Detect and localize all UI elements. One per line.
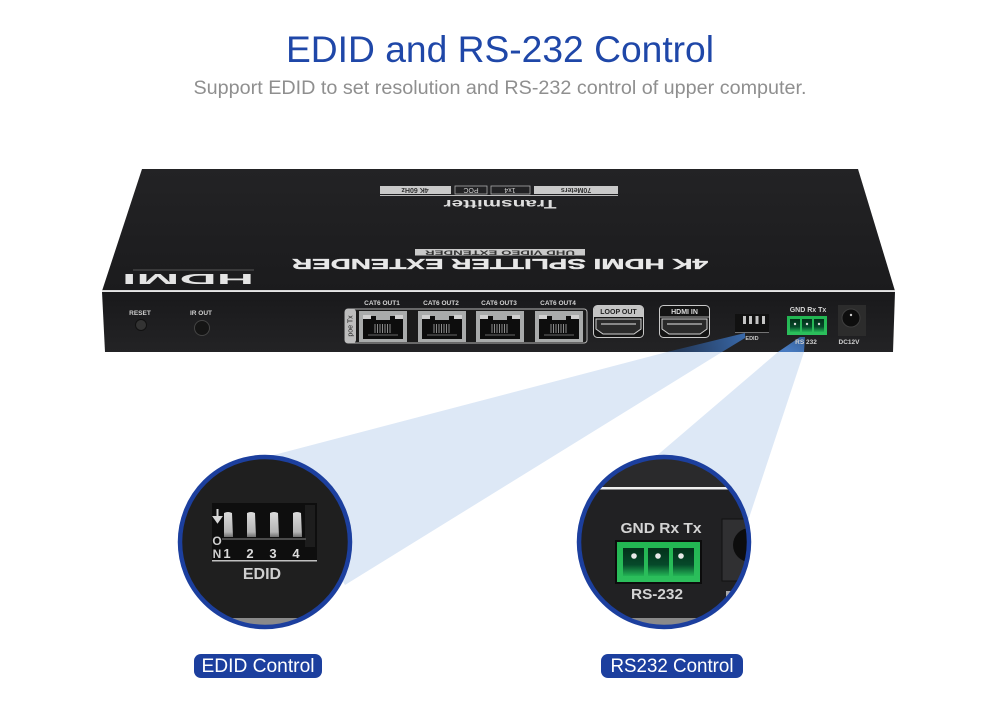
IR out jack [190,310,212,336]
HDMI logo: HDMI [122,270,254,287]
HDMI logo [122,270,254,287]
label pill: EDID Control: EDID Control [202,656,314,677]
DC 12V jack: DC12V [839,339,860,346]
device front panel [102,292,895,352]
callout circle: RS-232 close-up [576,454,752,630]
reset button [129,310,151,330]
callout circle: EDID close-up: 2 [246,546,254,561]
beam overlay on device: EDID [667,333,745,352]
loop out HDMI port [594,306,644,338]
title: EDID and RS-232 Control [286,29,714,70]
callout circle: RS-232 close-up: GND Rx Tx [620,521,702,537]
DC 12V jack [838,305,866,346]
loop out HDMI port: LOOP OUT [600,309,637,316]
light beam: EDID [270,352,722,585]
CAT6 output ports: CAT6 OUT4 [540,300,576,307]
RS-232 terminal: RS 232 [795,339,817,346]
RS-232 terminal: GND Rx Tx [790,307,826,314]
callout circle: EDID close-up: N [213,547,221,561]
UHD video extender tag: UHD VIDEO EXTENDER [424,248,575,255]
callout circle: EDID close-up: O [212,534,222,548]
IR out jack: IR OUT [190,310,212,317]
CAT6 output ports: poe Tx [347,315,354,337]
spec tags [380,186,618,196]
product name printed upside down: 4K HDMI SPLITTER EXTENDER [292,255,708,272]
label pill: RS232 Control: RS232 Control [610,656,734,677]
CAT6 output ports: CAT6 OUT2 [423,300,459,307]
spec tags: POC [463,186,479,193]
HDMI in port: HDMI IN [671,309,698,316]
reset button: RESET [129,310,151,317]
callout circle: EDID close-up: 1 [223,546,231,561]
spec tags: 1x4 [504,186,516,193]
EDID DIP switch [735,314,769,342]
callout circle: EDID close-up: 3 [269,546,277,561]
callout circle: EDID close-up [175,452,355,638]
RS-232 terminal [787,307,827,346]
device top panel [102,169,895,291]
UHD video extender tag [415,248,585,256]
EDID DIP switch: EDID [745,336,759,342]
beam overlay on device: RS-232 [778,337,805,352]
callout circle: RS-232 close-up: RS-232 [631,587,683,603]
spec tags: 70Meters [561,186,591,193]
callout circle: EDID close-up: EDID [243,566,281,583]
HDMI in port [660,306,710,338]
spec tags: 4K 60Hz [401,186,429,193]
CAT6 output ports: CAT6 OUT3 [481,300,517,307]
subtitle: Support EDID to set resolution and RS-232 control of upper computer. [194,78,806,99]
CAT6 output ports [345,300,587,343]
device: HDMI splitter extender [102,169,895,352]
callout circle: EDID close-up: 4 [292,546,300,561]
light beam: RS-232 [640,352,804,530]
transmitter label: Transmitter [443,197,556,211]
CAT6 output ports: CAT6 OUT1 [364,300,400,307]
